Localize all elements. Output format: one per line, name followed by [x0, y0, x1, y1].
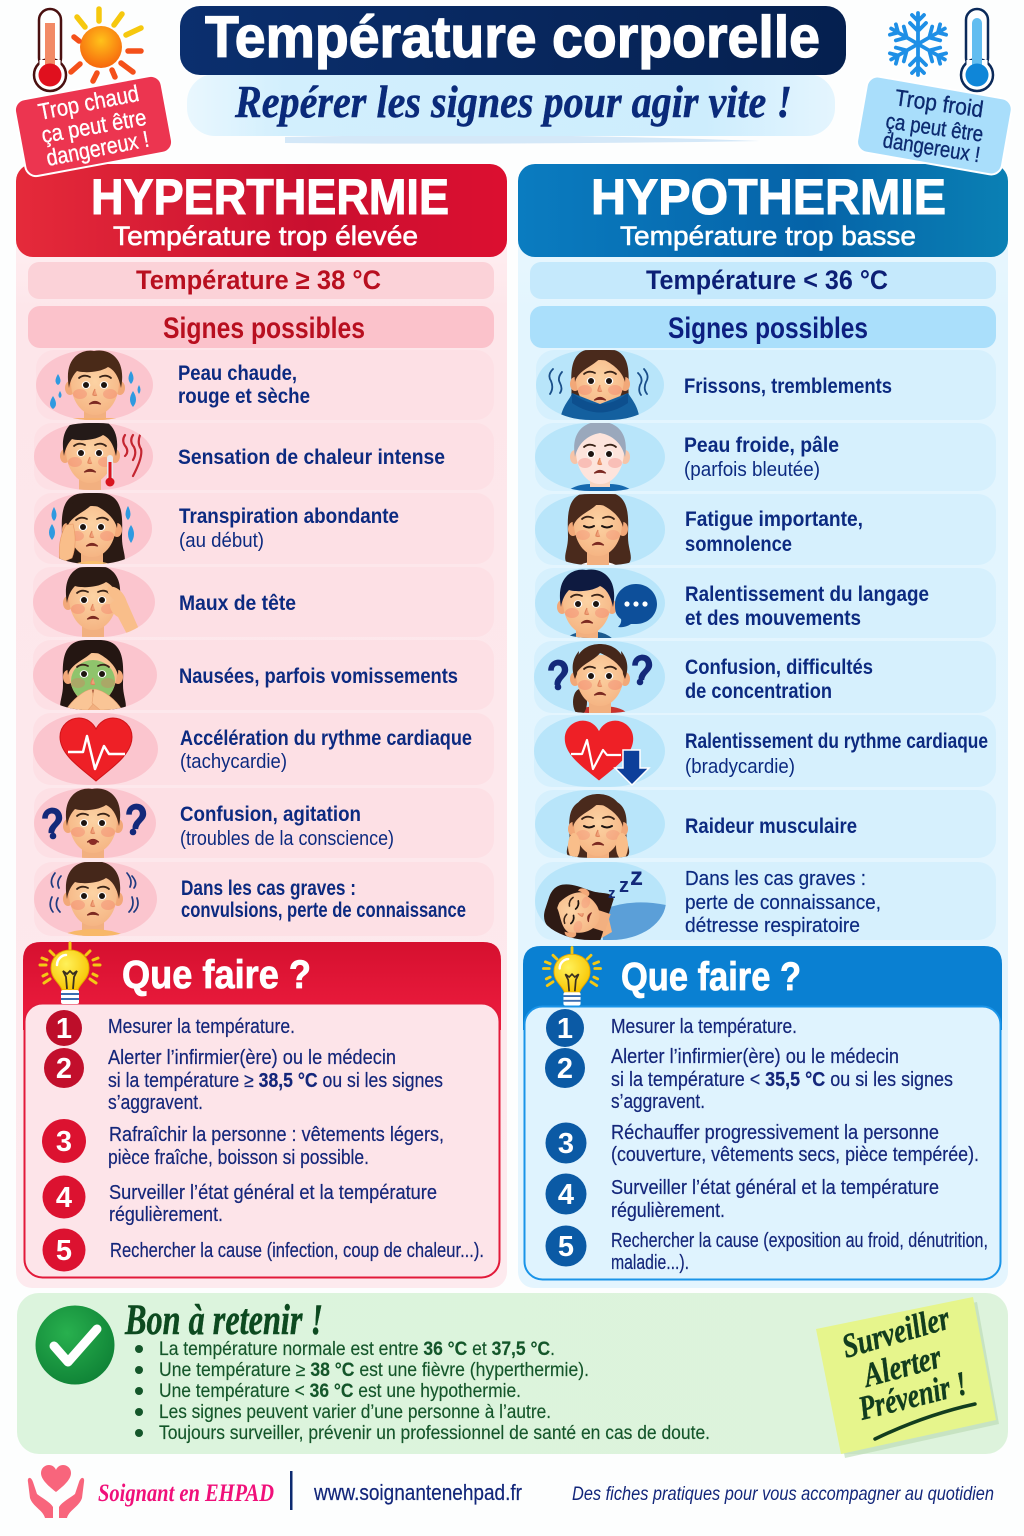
sign: hot red dry skin [36, 350, 310, 420]
hyperthermia heading: HYPERTHERMIE [91, 169, 449, 225]
sign: slow heartbeat [534, 715, 996, 787]
icon: sleep zzz: z [619, 875, 629, 897]
tag: too hot: Trop chaud [36, 80, 141, 125]
takeaways list: Une température < 36 °C est une hypothermie. [159, 1381, 521, 1402]
steps card [24, 1004, 500, 1278]
icon: down arrow [615, 750, 649, 785]
sign: hot red dry skin: Peau chaude, [178, 362, 297, 385]
hypothermia heading: HYPOTHERMIE [591, 169, 946, 225]
step 5: Rechercher la cause (infection, coup de chaleur...). [110, 1240, 484, 1262]
step 4: régulièrement. [611, 1200, 725, 1222]
icon: speech bubble [615, 584, 657, 627]
sign: shivering [536, 349, 996, 422]
sign: muscle stiffness [535, 790, 996, 858]
sign: headache: Maux de tête [179, 592, 296, 615]
cold badge [855, 9, 1013, 176]
tag: too hot [13, 74, 174, 178]
header banner [180, 5, 846, 144]
takeaways list: Une température ≥ 38 °C est une fièvre (hyperthermie). [159, 1360, 589, 1381]
what to do: hypothermia [523, 946, 1002, 1280]
step 5: 5 [558, 1231, 574, 1263]
step 3: pièce fraîche, boisson si possible. [108, 1147, 369, 1169]
signs heading: Signes possibles [668, 312, 868, 345]
step 1: Mesurer la température. [611, 1016, 797, 1038]
icon: light bulb [544, 948, 600, 1006]
sign: fatigue: Fatigue importante, [685, 508, 863, 531]
step 2 [545, 1046, 953, 1113]
panel: key takeaways [17, 1293, 1008, 1458]
step 4: 4 [558, 1179, 574, 1211]
step 2 [44, 1047, 443, 1114]
hyperthermia heading: Température trop élevée [113, 221, 418, 251]
icon: sleep zzz: z [608, 885, 616, 902]
sign: heavy sweating [34, 493, 398, 564]
sign: rapid heartbeat: Accélération du rythme cardiaque [180, 727, 472, 750]
sign: confusion: Confusion, difficultés [685, 656, 873, 679]
takeaways list: La température normale est entre 36 °C et 37,5 °C. [159, 1339, 555, 1360]
brand name: Soignant en EHPAD [98, 1480, 274, 1507]
sign: confusion: (troubles de la conscience) [180, 827, 394, 850]
step 2: 2 [557, 1053, 573, 1085]
step 1: 1 [56, 1013, 72, 1045]
temperature threshold [530, 262, 996, 299]
takeaways heading: Bon à retenir ! [124, 1297, 323, 1344]
icon: sleep zzz: z [630, 861, 643, 891]
que faire heading: Que faire ? [122, 953, 311, 997]
tag: too cold [855, 75, 1013, 176]
step 2: Alerter l’infirmier(ère) ou le médecin [611, 1046, 899, 1068]
sign: muscle stiffness: Raideur musculaire [685, 815, 857, 838]
sign: cold pale skin: (parfois bleutée) [684, 458, 820, 481]
temperature threshold: Température < 36 °C [646, 265, 888, 295]
sign: severe cases: Dans les cas graves : [685, 867, 866, 890]
step 3: 3 [56, 1126, 72, 1158]
tag: too hot: ça peut être [39, 104, 148, 148]
sign: headache [33, 567, 296, 637]
sign: convulsions: Dans les cas graves : [181, 877, 356, 900]
step 4: 4 [56, 1182, 72, 1214]
step 2: Alerter l’infirmier(ère) ou le médecin [108, 1047, 396, 1069]
icon: sun [71, 9, 141, 81]
step 3: 3 [558, 1128, 574, 1160]
takeaways list: Toujours surveiller, prévenir un professionnel de santé en cas de doute. [159, 1423, 710, 1444]
sticky note [816, 1297, 999, 1458]
step 2: s’aggravent. [108, 1092, 203, 1114]
logo [28, 1465, 84, 1518]
sign: slowed speech [535, 568, 996, 645]
que faire heading [23, 942, 501, 1030]
title: Température corporelle [205, 5, 820, 70]
sign: nausea: Nausées, parfois vomissements [179, 665, 458, 688]
temperature threshold: Température ≥ 38 °C [136, 265, 381, 295]
icon: snowflake [887, 13, 949, 75]
panel: hyperthermia [16, 164, 507, 1288]
sign: rapid heartbeat: (tachycardie) [180, 750, 287, 773]
hot badge [13, 9, 174, 178]
sign: severe cases: détresse respiratoire [685, 914, 860, 937]
tag: too hot: dangereux ! [44, 126, 151, 171]
step 1 [546, 1009, 797, 1047]
temperature threshold [28, 262, 494, 299]
sign: cold pale skin [535, 422, 996, 492]
sign: slowed speech: et des mouvements [685, 607, 861, 630]
sign: convulsions: convulsions, perte de connaissance [181, 899, 466, 922]
sign: shivering: Frissons, tremblements [684, 375, 892, 398]
panel background [16, 200, 507, 1288]
que faire heading [523, 946, 1002, 1030]
hypothermia heading [518, 164, 1008, 257]
step 2: si la température < 35,5 °C ou si les signes [611, 1069, 953, 1091]
step 4 [42, 1176, 437, 1226]
step 3: (couverture, vêtements secs, pièce tempérée). [611, 1144, 979, 1166]
sign: fatigue: somnolence [685, 533, 792, 556]
sign: confusion: de concentration [685, 680, 832, 703]
website: www.soignantenehpad.fr [313, 1480, 522, 1505]
hyperthermia heading [16, 164, 507, 257]
footer [28, 1465, 994, 1518]
step 5: maladie...). [611, 1252, 689, 1274]
step 4 [546, 1174, 939, 1222]
sign: intense heat [34, 423, 444, 490]
step 4: Surveiller l’état général et la température [611, 1177, 939, 1199]
sign: confusion [34, 788, 494, 864]
step 3: Réchauffer progressivement la personne [611, 1122, 939, 1144]
panel background [518, 200, 1008, 1288]
step 3 [42, 1119, 444, 1169]
sign: fatigue [535, 494, 996, 565]
signs heading [28, 306, 494, 348]
step 5 [42, 1228, 484, 1272]
subtitle pill [187, 74, 835, 144]
step 2: 2 [56, 1053, 72, 1085]
sign: confusion: Confusion, agitation [180, 803, 361, 826]
sign: heavy sweating: Transpiration abondante [179, 505, 399, 528]
icon: check mark [36, 1306, 114, 1384]
sign: rapid heartbeat [33, 713, 494, 785]
icon: thermometer cold [961, 9, 993, 91]
step 2: si la température ≥ 38,5 °C ou si les signes [108, 1070, 443, 1092]
sign: nausea [33, 640, 458, 710]
sticky note: Prévenir ! [854, 1365, 971, 1428]
icon: sleep zzz [608, 861, 643, 902]
step 3: Rafraîchir la personne : vêtements légers, [109, 1124, 444, 1146]
icon: light bulb [40, 943, 100, 1004]
sign: convulsions [34, 861, 494, 943]
tag: too cold: Trop froid [893, 84, 985, 122]
sign: hot red dry skin: rouge et sèche [178, 385, 310, 408]
panel: hypothermia [518, 164, 1008, 1288]
sticky note: Alerter [858, 1338, 946, 1395]
signs heading: Signes possibles [163, 312, 365, 345]
sign: intense heat: Sensation de chaleur intense [178, 446, 445, 469]
que faire heading: Que faire ? [621, 955, 801, 999]
sign: severe cases [535, 862, 996, 940]
sign: confusion [534, 641, 996, 717]
hypothermia heading: Température trop basse [620, 221, 916, 251]
steps card [524, 1006, 1000, 1280]
step 2: s’aggravent. [611, 1091, 705, 1113]
step 3 [546, 1122, 979, 1166]
sign: cold pale skin: Peau froide, pâle [684, 434, 839, 457]
step 4: régulièrement. [109, 1204, 223, 1226]
step 1: 1 [557, 1013, 573, 1045]
step 5 [546, 1226, 988, 1274]
sign: slowed speech: Ralentissement du langage [685, 583, 929, 606]
step 1 [46, 1010, 295, 1046]
tag: too cold: dangereux ! [881, 127, 982, 167]
icon: thermometer hot [34, 9, 66, 91]
signs heading [530, 306, 996, 348]
takeaways list [135, 1339, 710, 1444]
subtitle pill: Repérer les signes pour agir vite ! [234, 76, 792, 127]
sticky note: Surveiller [838, 1300, 955, 1366]
sign: heavy sweating: (au début) [179, 529, 264, 552]
step 1: Mesurer la température. [108, 1016, 295, 1038]
sign: slow heartbeat: (bradycardie) [685, 755, 795, 778]
step 5: 5 [56, 1235, 72, 1267]
tag: too cold: ça peut être [884, 108, 985, 147]
sign: severe cases: perte de connaissance, [685, 891, 881, 914]
step 4: Surveiller l’état général et la température [109, 1182, 437, 1204]
takeaways list: Les signes peuvent varier d’une personne à l’autre. [159, 1402, 551, 1423]
what to do: hyperthermia [23, 942, 501, 1278]
